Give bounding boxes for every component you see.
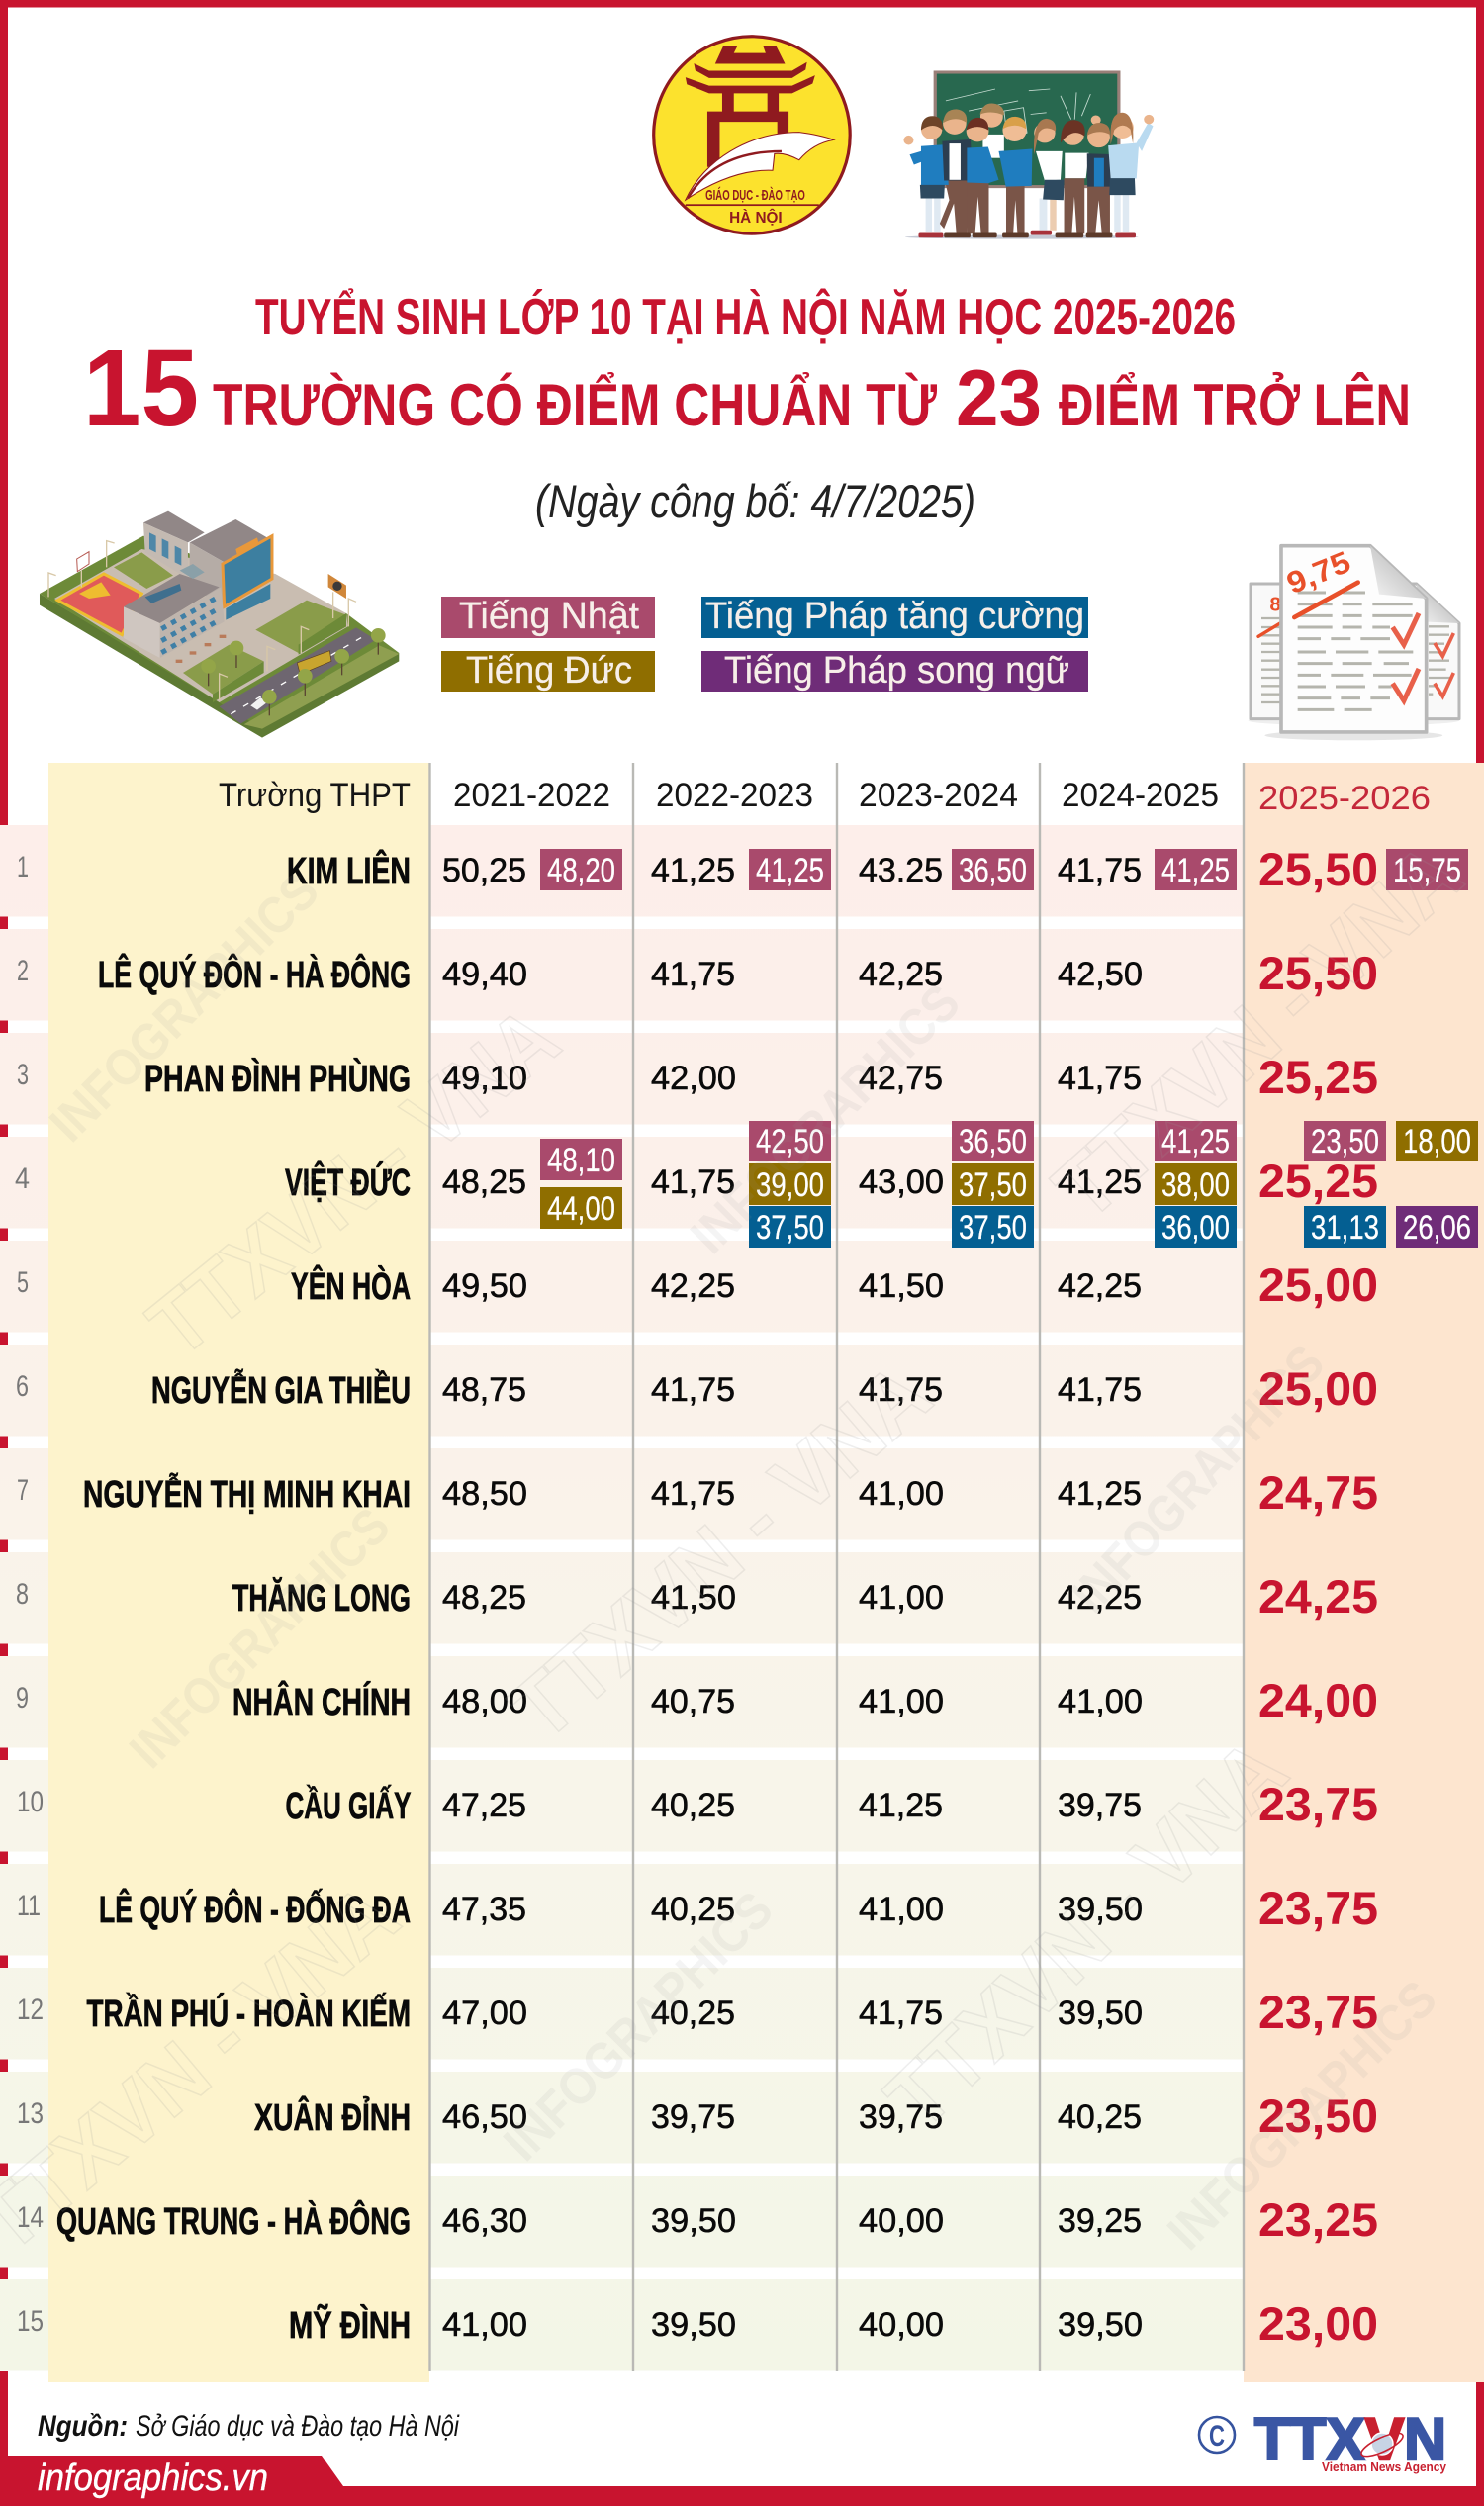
watermark: INFOGRAPHICS and TTXVN diagonals: INFOGRAPHICS	[39, 862, 330, 1153]
watermark: INFOGRAPHICS and TTXVN diagonals: INFOGRAPHICS	[493, 1881, 785, 2172]
row 13: Xuân Đỉnh: 39,75	[651, 2098, 735, 2136]
row 11: Lê Quý Đôn - Đống Đa: 40,25	[651, 1891, 735, 1928]
row 6: Nguyễn Gia Thiều: 41,75	[651, 1371, 735, 1409]
source note: Sở Giáo dục và Đào tạo Hà Nội	[136, 2410, 460, 2443]
row 10: Cầu Giấy: 40,25	[651, 1787, 735, 1824]
badges 2022: 37,50	[756, 1209, 824, 1247]
row 9: Nhân Chính: 41,00	[859, 1683, 944, 1720]
row 7: Nguyễn Thị Minh Khai: 41,00	[859, 1475, 944, 1513]
legend: German: Tiếng Đức	[466, 650, 632, 692]
school name: QUANG TRUNG - HÀ ĐÔNG	[56, 2198, 411, 2243]
row 2: Lê Quý Đôn - Hà Đông: 42,25	[859, 956, 943, 993]
table header row	[219, 777, 1431, 817]
school name: NHÂN CHÍNH	[232, 1680, 411, 1723]
latest cutoff: 23,00	[1258, 2297, 1378, 2350]
row 2: Lê Quý Đôn - Hà Đông: 41,75	[651, 956, 735, 993]
row 8: Thăng Long: 42,25	[1058, 1579, 1142, 1617]
badges 2022: 39,00	[756, 1166, 824, 1204]
row 9: Nhân Chính: 9	[16, 1682, 29, 1715]
badges 2024	[1155, 1121, 1237, 1248]
watermark: INFOGRAPHICS and TTXVN diagonals: TTXVN - VNA	[493, 1344, 949, 1758]
latest cutoff: 24,75	[1258, 1466, 1378, 1519]
row 5: Yên Hòa: 42,25	[651, 1267, 735, 1305]
row 11: Lê Quý Đôn - Đống Đa: 47,35	[442, 1891, 526, 1928]
row 7: Nguyễn Thị Minh Khai: 48,50	[442, 1475, 527, 1513]
row 8: Thăng Long	[16, 1570, 1378, 1623]
row 4: Việt Đức: 4	[15, 1162, 30, 1195]
website label: infographics.vn	[38, 2458, 268, 2499]
row 15: Mỹ Đình: 39,50	[1058, 2306, 1143, 2344]
badges 2021: 48,10	[547, 1142, 615, 1179]
row 14: Quang Trung - Hà Đông: 46,30	[442, 2202, 527, 2240]
school name: NGUYỄN GIA THIỀU	[151, 1368, 411, 1412]
row 7: Nguyễn Thị Minh Khai: 41,75	[651, 1475, 735, 1513]
icon: Hanoi education department logo	[654, 37, 850, 233]
latest cutoff: 24,00	[1258, 1674, 1378, 1726]
badges 2024: 38,00	[1161, 1166, 1230, 1204]
badges 2021	[540, 1139, 622, 1229]
latest cutoff: 23,75	[1258, 1882, 1378, 1934]
latest cutoff: 25,50	[1258, 843, 1378, 895]
row 11: Lê Quý Đôn - Đống Đa: 39,50	[1058, 1891, 1143, 1928]
row 15: Mỹ Đình	[17, 2297, 1378, 2350]
school name: YÊN HÒA	[291, 1264, 411, 1308]
badges 2022	[749, 1121, 831, 1248]
row 12: Trần Phú - Hoàn Kiếm: 40,25	[651, 1995, 735, 2032]
badge: Japanese 2024: 41,25	[1161, 852, 1230, 889]
latest cutoff: 25,00	[1258, 1258, 1378, 1311]
row 10: Cầu Giấy	[17, 1778, 1378, 1830]
row 7: Nguyễn Thị Minh Khai: 41,25	[1058, 1475, 1142, 1513]
row 4: Việt Đức: 41,25	[1058, 1163, 1142, 1201]
row 14: Quang Trung - Hà Đông: 40,00	[859, 2202, 944, 2240]
row 13: Xuân Đỉnh: 39,75	[859, 2098, 943, 2136]
row 8: Thăng Long: 48,25	[442, 1579, 526, 1617]
row 12: Trần Phú - Hoàn Kiếm	[17, 1986, 1378, 2038]
row 13: Xuân Đỉnh: 46,50	[442, 2098, 527, 2136]
badges 2025	[1304, 1121, 1478, 1248]
latest cutoff: 23,75	[1258, 1778, 1378, 1830]
header: school: Trường THPT	[219, 777, 411, 814]
legend: French intensive: Tiếng Pháp tăng cường	[705, 596, 1084, 637]
row 15: Mỹ Đình: 39,50	[651, 2306, 736, 2344]
row 6: Nguyễn Gia Thiều	[16, 1362, 1378, 1415]
row 13: Xuân Đỉnh	[17, 2089, 1378, 2142]
badges 2024: 41,25	[1161, 1123, 1230, 1160]
row 5: Yên Hòa: 5	[17, 1266, 29, 1299]
row 3: Phan Đình Phùng: 49,10	[442, 1060, 527, 1097]
latest cutoff: 23,75	[1258, 1986, 1378, 2038]
source note: Nguồn:	[38, 2410, 128, 2443]
row 2: Lê Quý Đôn - Hà Đông	[17, 947, 1378, 999]
school name: VIỆT ĐỨC	[285, 1160, 411, 1204]
watermark: INFOGRAPHICS and TTXVN diagonals: INFOGRAPHICS	[119, 1498, 401, 1779]
row 10: Cầu Giấy: 10	[17, 1786, 44, 1818]
watermark: INFOGRAPHICS and TTXVN diagonals: INFOGRAPHICS	[1061, 1335, 1336, 1624]
row 8: Thăng Long: 8	[16, 1578, 29, 1611]
badge: Japanese 2022: 41,25	[756, 852, 824, 889]
legend: language programme colours	[441, 596, 1088, 692]
row 1: Kim Liên: 41,25	[651, 852, 735, 889]
watermark: INFOGRAPHICS and TTXVN diagonals: INFOGRAPHICS	[1157, 1970, 1448, 2261]
school name: PHAN ĐÌNH PHÙNG	[144, 1057, 411, 1100]
school name: LÊ QUÝ ĐÔN - HÀ ĐÔNG	[98, 952, 411, 996]
row 1: Kim Liên: 50,25	[442, 852, 526, 889]
copyright symbol	[1199, 2417, 1235, 2453]
row 3: Phan Đình Phùng	[17, 1051, 1378, 1103]
row 3: Phan Đình Phùng: 42,75	[859, 1060, 943, 1097]
badges 2021: 44,00	[547, 1190, 615, 1228]
row 4: Việt Đức: 43,00	[859, 1163, 944, 1201]
row 12: Trần Phú - Hoàn Kiếm: 41,75	[859, 1995, 943, 2032]
row 14: Quang Trung - Hà Đông: 39,50	[651, 2202, 736, 2240]
main paper score: 9,75	[1282, 545, 1355, 601]
row 10: Cầu Giấy: 41,25	[859, 1787, 943, 1824]
row 11: Lê Quý Đôn - Đống Đa: 41,00	[859, 1891, 944, 1928]
latest cutoff: 24,25	[1258, 1570, 1378, 1623]
legs, trousers and socks	[918, 178, 1136, 237]
heading line 2: number 15: 15	[83, 327, 199, 449]
back paper score: 8	[1269, 593, 1281, 615]
row 12: Trần Phú - Hoàn Kiếm: 12	[17, 1994, 44, 2026]
row 8: Thăng Long: 41,50	[651, 1579, 736, 1617]
row 3: Phan Đình Phùng: 42,00	[651, 1060, 736, 1097]
row 2: Lê Quý Đôn - Hà Đông: 2	[17, 955, 29, 987]
row 2: Lê Quý Đôn - Hà Đông: 49,40	[442, 956, 527, 993]
row 12: Trần Phú - Hoàn Kiếm: 39,50	[1058, 1995, 1143, 2032]
row 9: Nhân Chính: 41,00	[1058, 1683, 1143, 1720]
row 15: Mỹ Đình: 41,00	[442, 2306, 527, 2344]
copyright symbol: C	[1209, 2420, 1225, 2453]
row 4: Việt Đức	[15, 1121, 1478, 1248]
school name: NGUYỄN THỊ MINH KHAI	[83, 1472, 411, 1516]
header: 2024-2025: 2024-2025	[1062, 777, 1219, 814]
source note	[38, 2410, 460, 2443]
row 1: Kim Liên: 41,75	[1058, 852, 1142, 889]
row 3: Phan Đình Phùng: 3	[17, 1059, 29, 1091]
school name: MỸ ĐÌNH	[289, 2303, 411, 2347]
row 11: Lê Quý Đôn - Đống Đa	[17, 1882, 1378, 1934]
icon: students in front of a chalkboard	[903, 72, 1154, 239]
row 10: Cầu Giấy: 39,75	[1058, 1787, 1142, 1824]
row 9: Nhân Chính: 48,00	[442, 1683, 527, 1720]
row 5: Yên Hòa	[17, 1258, 1378, 1311]
row 14: Quang Trung - Hà Đông: 39,25	[1058, 2202, 1142, 2240]
badge: Japanese 2021: 48,20	[547, 852, 615, 889]
latest cutoff: 23,25	[1258, 2193, 1378, 2246]
watermark: INFOGRAPHICS and TTXVN diagonals: TTXVN - VNA	[131, 987, 577, 1375]
publication date: (Ngày công bố: 4/7/2025)	[535, 475, 975, 527]
badges 2023: 37,50	[959, 1209, 1027, 1247]
latest cutoff: 25,00	[1258, 1362, 1378, 1415]
badges 2023	[952, 1121, 1034, 1248]
back student	[980, 104, 1004, 158]
latest cutoff: 25,50	[1258, 947, 1378, 999]
row 6: Nguyễn Gia Thiều: 41,75	[859, 1371, 943, 1409]
TTXVN logo: TTXVN	[1254, 2406, 1446, 2472]
row 6: Nguyễn Gia Thiều: 6	[16, 1370, 29, 1403]
school name: XUÂN ĐỈNH	[254, 2095, 411, 2139]
row 13: Xuân Đỉnh: 40,25	[1058, 2098, 1142, 2136]
watermark: INFOGRAPHICS and TTXVN diagonals	[0, 824, 1479, 2271]
torsos and skirts	[910, 123, 1154, 200]
logo text: Hanoi: HÀ NỘI	[729, 208, 783, 227]
badges 2022: 42,50	[756, 1123, 824, 1160]
row 1: Kim Liên	[17, 843, 1468, 895]
school name: TRẦN PHÚ - HOÀN KIẾM	[87, 1992, 411, 2035]
watermark: INFOGRAPHICS and TTXVN diagonals: TTXVN - VNA	[867, 1719, 1305, 2148]
header: 2022-2023: 2022-2023	[656, 777, 813, 814]
row 3: Phan Đình Phùng: 41,75	[1058, 1060, 1142, 1097]
school name: THĂNG LONG	[232, 1576, 411, 1620]
row 6: Nguyễn Gia Thiều: 48,75	[442, 1371, 526, 1409]
row 4: Việt Đức: 41,75	[651, 1163, 735, 1201]
row 14: Quang Trung - Hà Đông	[17, 2193, 1378, 2246]
row 7: Nguyễn Thị Minh Khai	[17, 1466, 1378, 1519]
latest cutoff: 25,25	[1258, 1051, 1378, 1103]
badge: Japanese 2023: 36,50	[959, 852, 1027, 889]
heading line 2: schools with cutoff from: TRƯỜNG CÓ ĐIỂM CHUẨN TỪ	[213, 372, 937, 438]
row 12: Trần Phú - Hoàn Kiếm: 47,00	[442, 1995, 527, 2032]
row 15: Mỹ Đình: 15	[17, 2305, 44, 2338]
school name: CẦU GIẤY	[285, 1784, 412, 1827]
row 9: Nhân Chính	[16, 1674, 1378, 1726]
header: 2023-2024: 2023-2024	[859, 777, 1018, 814]
latest cutoff: 25,25	[1258, 1155, 1378, 1207]
badges 2023: 37,50	[959, 1166, 1027, 1204]
row 15: Mỹ Đình: 40,00	[859, 2306, 944, 2344]
row 1: Kim Liên: 43.25	[859, 852, 943, 889]
row 11: Lê Quý Đôn - Đống Đa: 11	[17, 1890, 41, 1922]
heading line 2: points and above: ĐIỂM TRỞ LÊN	[1059, 372, 1411, 438]
row 5: Yên Hòa: 49,50	[442, 1267, 527, 1305]
latest cutoff: 23,50	[1258, 2089, 1378, 2142]
agency name: Vietnam News Agency	[1322, 2460, 1447, 2474]
legend: French bilingual: Tiếng Pháp song ngữ	[724, 650, 1069, 692]
row 10: Cầu Giấy: 47,25	[442, 1787, 526, 1824]
header: 2025-2026: 2025-2026	[1258, 780, 1431, 817]
badge: Japanese 2025: 15,75	[1393, 852, 1461, 889]
row 13: Xuân Đỉnh: 13	[17, 2097, 44, 2130]
heads and hair	[903, 109, 1154, 154]
row 7: Nguyễn Thị Minh Khai: 7	[17, 1474, 29, 1507]
row 2: Lê Quý Đôn - Hà Đông: 42,50	[1058, 956, 1143, 993]
school name: KIM LIÊN	[287, 849, 411, 892]
table: school name column background	[48, 763, 429, 2382]
table: current year column background	[1244, 763, 1484, 2382]
row 4: Việt Đức: 48,25	[442, 1163, 526, 1201]
watermark: INFOGRAPHICS and TTXVN diagonals: INFOGRAPHICS	[680, 974, 972, 1264]
row 6: Nguyễn Gia Thiều: 41,75	[1058, 1371, 1142, 1409]
legend: Japanese: Tiếng Nhật	[459, 596, 639, 637]
badges 2025: 31,13	[1311, 1209, 1379, 1247]
badges 2025: 23,50	[1311, 1123, 1379, 1160]
row 8: Thăng Long: 41,00	[859, 1579, 944, 1617]
logo text: education and training: GIÁO DỤC - ĐÀO TẠO	[705, 187, 805, 204]
row 9: Nhân Chính: 40,75	[651, 1683, 735, 1720]
row 1: Kim Liên: 1	[17, 851, 29, 883]
table: background bands for 15 rows	[0, 825, 1244, 2370]
icon: isometric school	[40, 511, 399, 738]
heading line 2: number 23: 23	[956, 354, 1042, 443]
badges 2023: 36,50	[959, 1123, 1027, 1160]
badges 2024: 36,00	[1161, 1209, 1230, 1247]
school name: LÊ QUÝ ĐÔN - ĐỐNG ĐA	[99, 1887, 411, 1931]
header: 2021-2022: 2021-2022	[453, 777, 610, 814]
row 5: Yên Hòa: 41,50	[859, 1267, 944, 1305]
icon: graded exam papers	[1249, 545, 1459, 740]
row 14: Quang Trung - Hà Đông: 14	[17, 2201, 44, 2234]
row 5: Yên Hòa: 42,25	[1058, 1267, 1142, 1305]
